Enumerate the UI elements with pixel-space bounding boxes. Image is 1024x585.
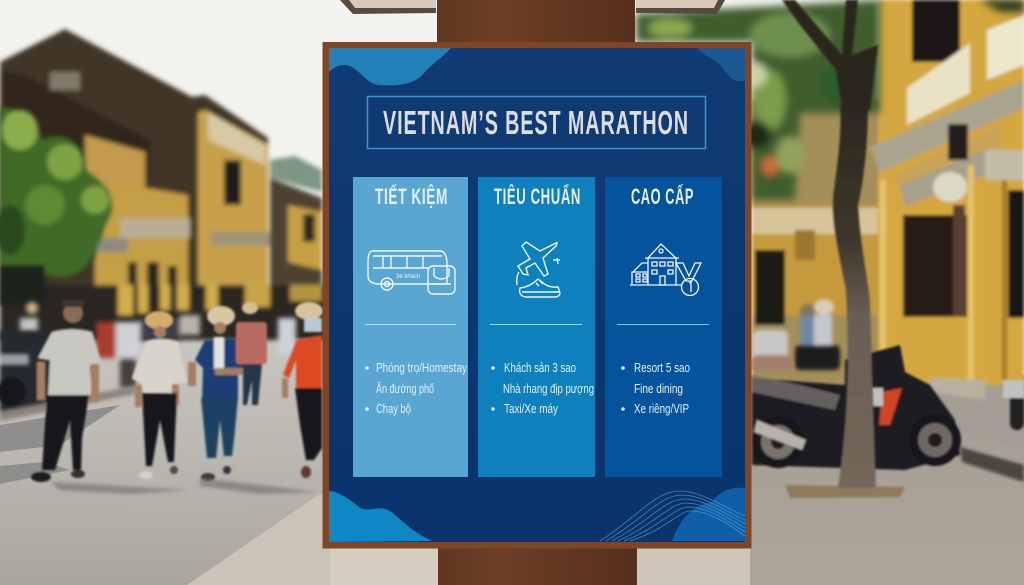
wooden post bottom [438, 546, 637, 585]
list: Cao cấp options: Xe riêng/VIP [634, 401, 689, 416]
decorative wave bottom left [329, 491, 432, 542]
background: parked motorbikes [752, 299, 1024, 498]
wooden post top with canopy [340, 0, 725, 44]
background: right tree trunk [782, 0, 878, 488]
column: Cao cấp [605, 177, 722, 477]
title box [368, 96, 706, 148]
column: Tiêu chuẩn [478, 177, 595, 477]
heading: Cao cấp: CAO CẤP [631, 184, 694, 209]
list: Tiết kiệm options: Phóng trọ/Homestay [376, 360, 467, 375]
woman with hat in cream blouse [132, 311, 187, 479]
decorative wave top left [329, 48, 451, 85]
column: Tiết kiệm [353, 177, 468, 477]
man in white t-shirt [31, 300, 101, 482]
decorative wave bottom right [600, 488, 745, 541]
shadows on road [50, 478, 318, 494]
list: Tiết kiệm options [365, 360, 467, 416]
divider [490, 324, 582, 325]
board frame [322, 42, 752, 548]
icon: resort building with medal [630, 244, 701, 296]
list: Tiết kiệm options: Chạy bộ [376, 401, 411, 416]
list: Cao cấp options: Resort 5 sao [634, 360, 690, 375]
background: right buildings [752, 0, 1024, 482]
person in pink shirt [236, 302, 267, 405]
list: Tiêu chuẩn options [491, 360, 594, 416]
list: Tiêu chuẩn options: Taxi/Xe máy [504, 401, 558, 416]
icon: bus with backpack [368, 251, 455, 294]
decorative wave top right [697, 48, 745, 81]
heading: Tiết kiệm: TIẾT KIỆM [375, 184, 448, 209]
list: Tiêu chuẩn options: Khách sản 3 sao [504, 360, 576, 375]
list: Cao cấp options [621, 360, 690, 416]
list: Tiêu chuẩn options: Nhà rhang địp pượng [503, 381, 594, 396]
divider [617, 324, 709, 325]
woman in red top with mask [282, 302, 323, 478]
background: right tree foliage [636, 0, 1024, 200]
icon: bus with backpack: 3e khách [396, 274, 420, 280]
background: pedestrians [0, 300, 323, 494]
title text: VIETNAM’S BEST MARATHON [383, 104, 689, 141]
sign board [322, 42, 752, 548]
divider [365, 324, 456, 325]
list: Tiết kiệm options: Ăn đường phố [376, 381, 434, 396]
board face [329, 48, 745, 542]
list: Cao cấp options: Fine dining [634, 381, 683, 396]
crowd behind [20, 302, 296, 388]
background: left tree [0, 108, 112, 305]
background: left buildings [0, 29, 330, 340]
icon: plane and running shoe [517, 242, 560, 297]
left parked bikes [0, 330, 135, 421]
heading: Tiêu chuẩn: TIÊU CHUẨN [494, 184, 581, 209]
woman with hat in navy shirt [188, 306, 247, 481]
